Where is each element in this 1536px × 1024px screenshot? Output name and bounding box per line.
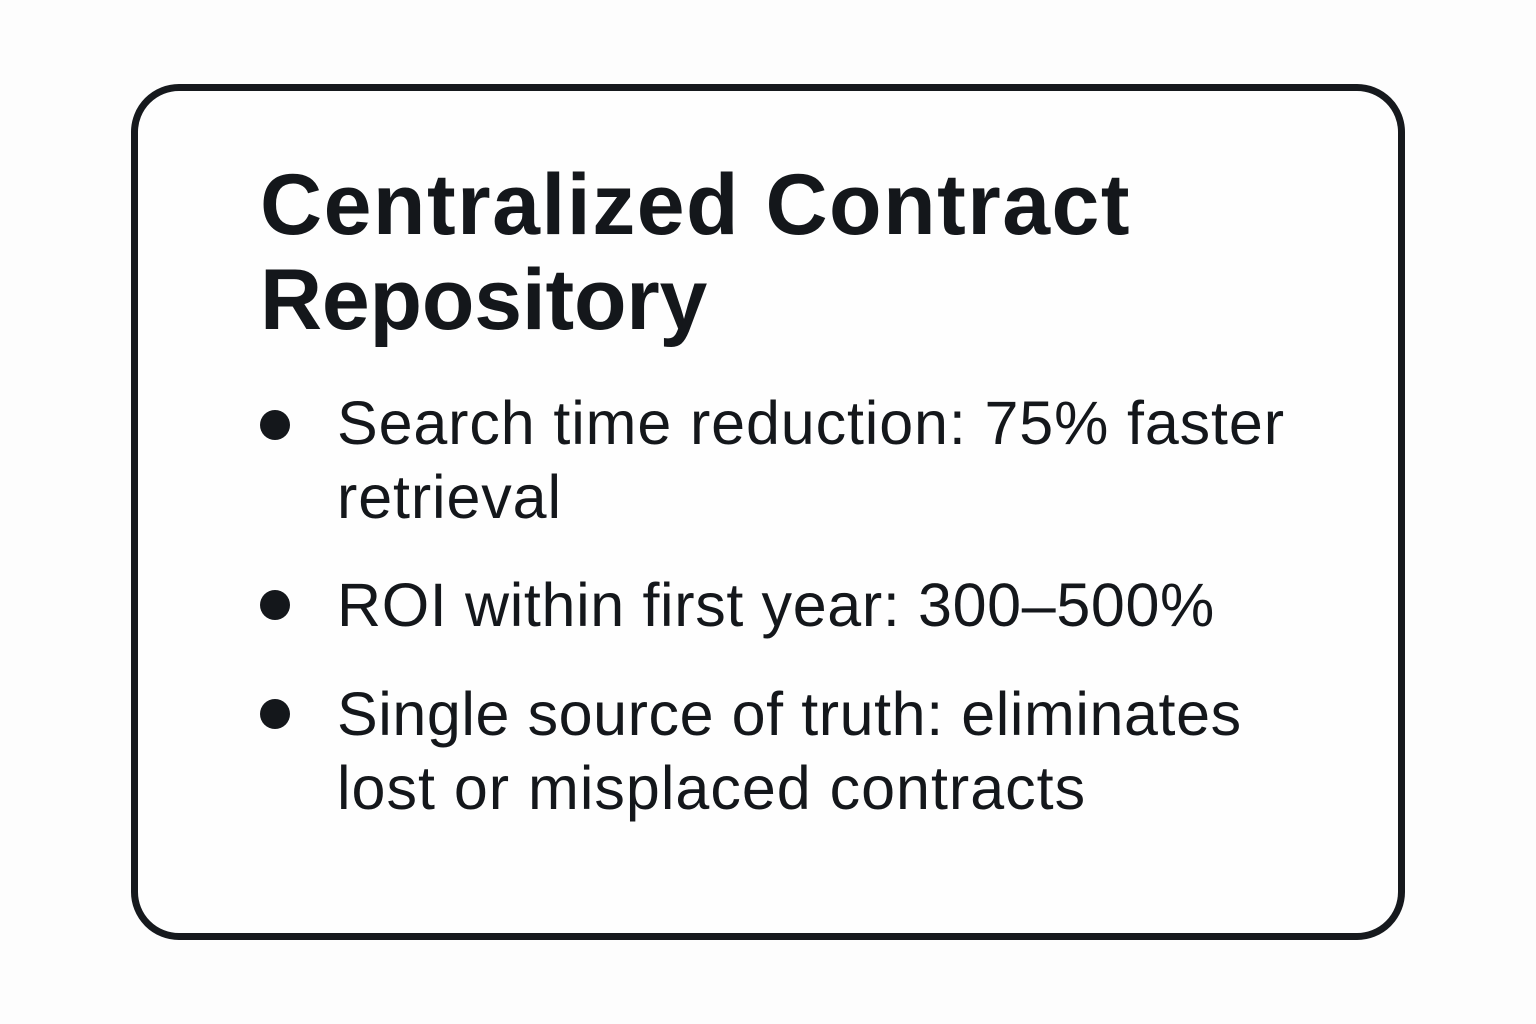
text: search time reduction — [337, 389, 1285, 531]
text: search time reduction: Search time reduction: 75% faster — [337, 389, 1285, 457]
panel: contract repository card — [131, 84, 1405, 940]
icon: bullet dot — [260, 699, 290, 729]
heading: Centralized Contract Repository: Repository — [260, 252, 707, 348]
heading: Centralized Contract Repository: Centralized Contract — [260, 157, 1131, 253]
text: single source of truth: Single source of truth: eliminates — [337, 680, 1242, 748]
bullet 1: search time reduction — [260, 389, 1285, 531]
icon: bullet dot — [260, 590, 290, 620]
text: single source of truth — [337, 680, 1242, 822]
bullet 2: ROI within first year — [260, 571, 1215, 639]
heading: Centralized Contract Repository — [260, 157, 1131, 348]
bullet 3: single source of truth — [260, 680, 1242, 822]
text: search time reduction: retrieval — [337, 463, 562, 531]
icon: bullet dot — [260, 410, 290, 440]
text: ROI within first year: ROI within first year: 300–500% — [337, 571, 1215, 639]
text: single source of truth: lost or misplaced contracts — [337, 754, 1086, 822]
